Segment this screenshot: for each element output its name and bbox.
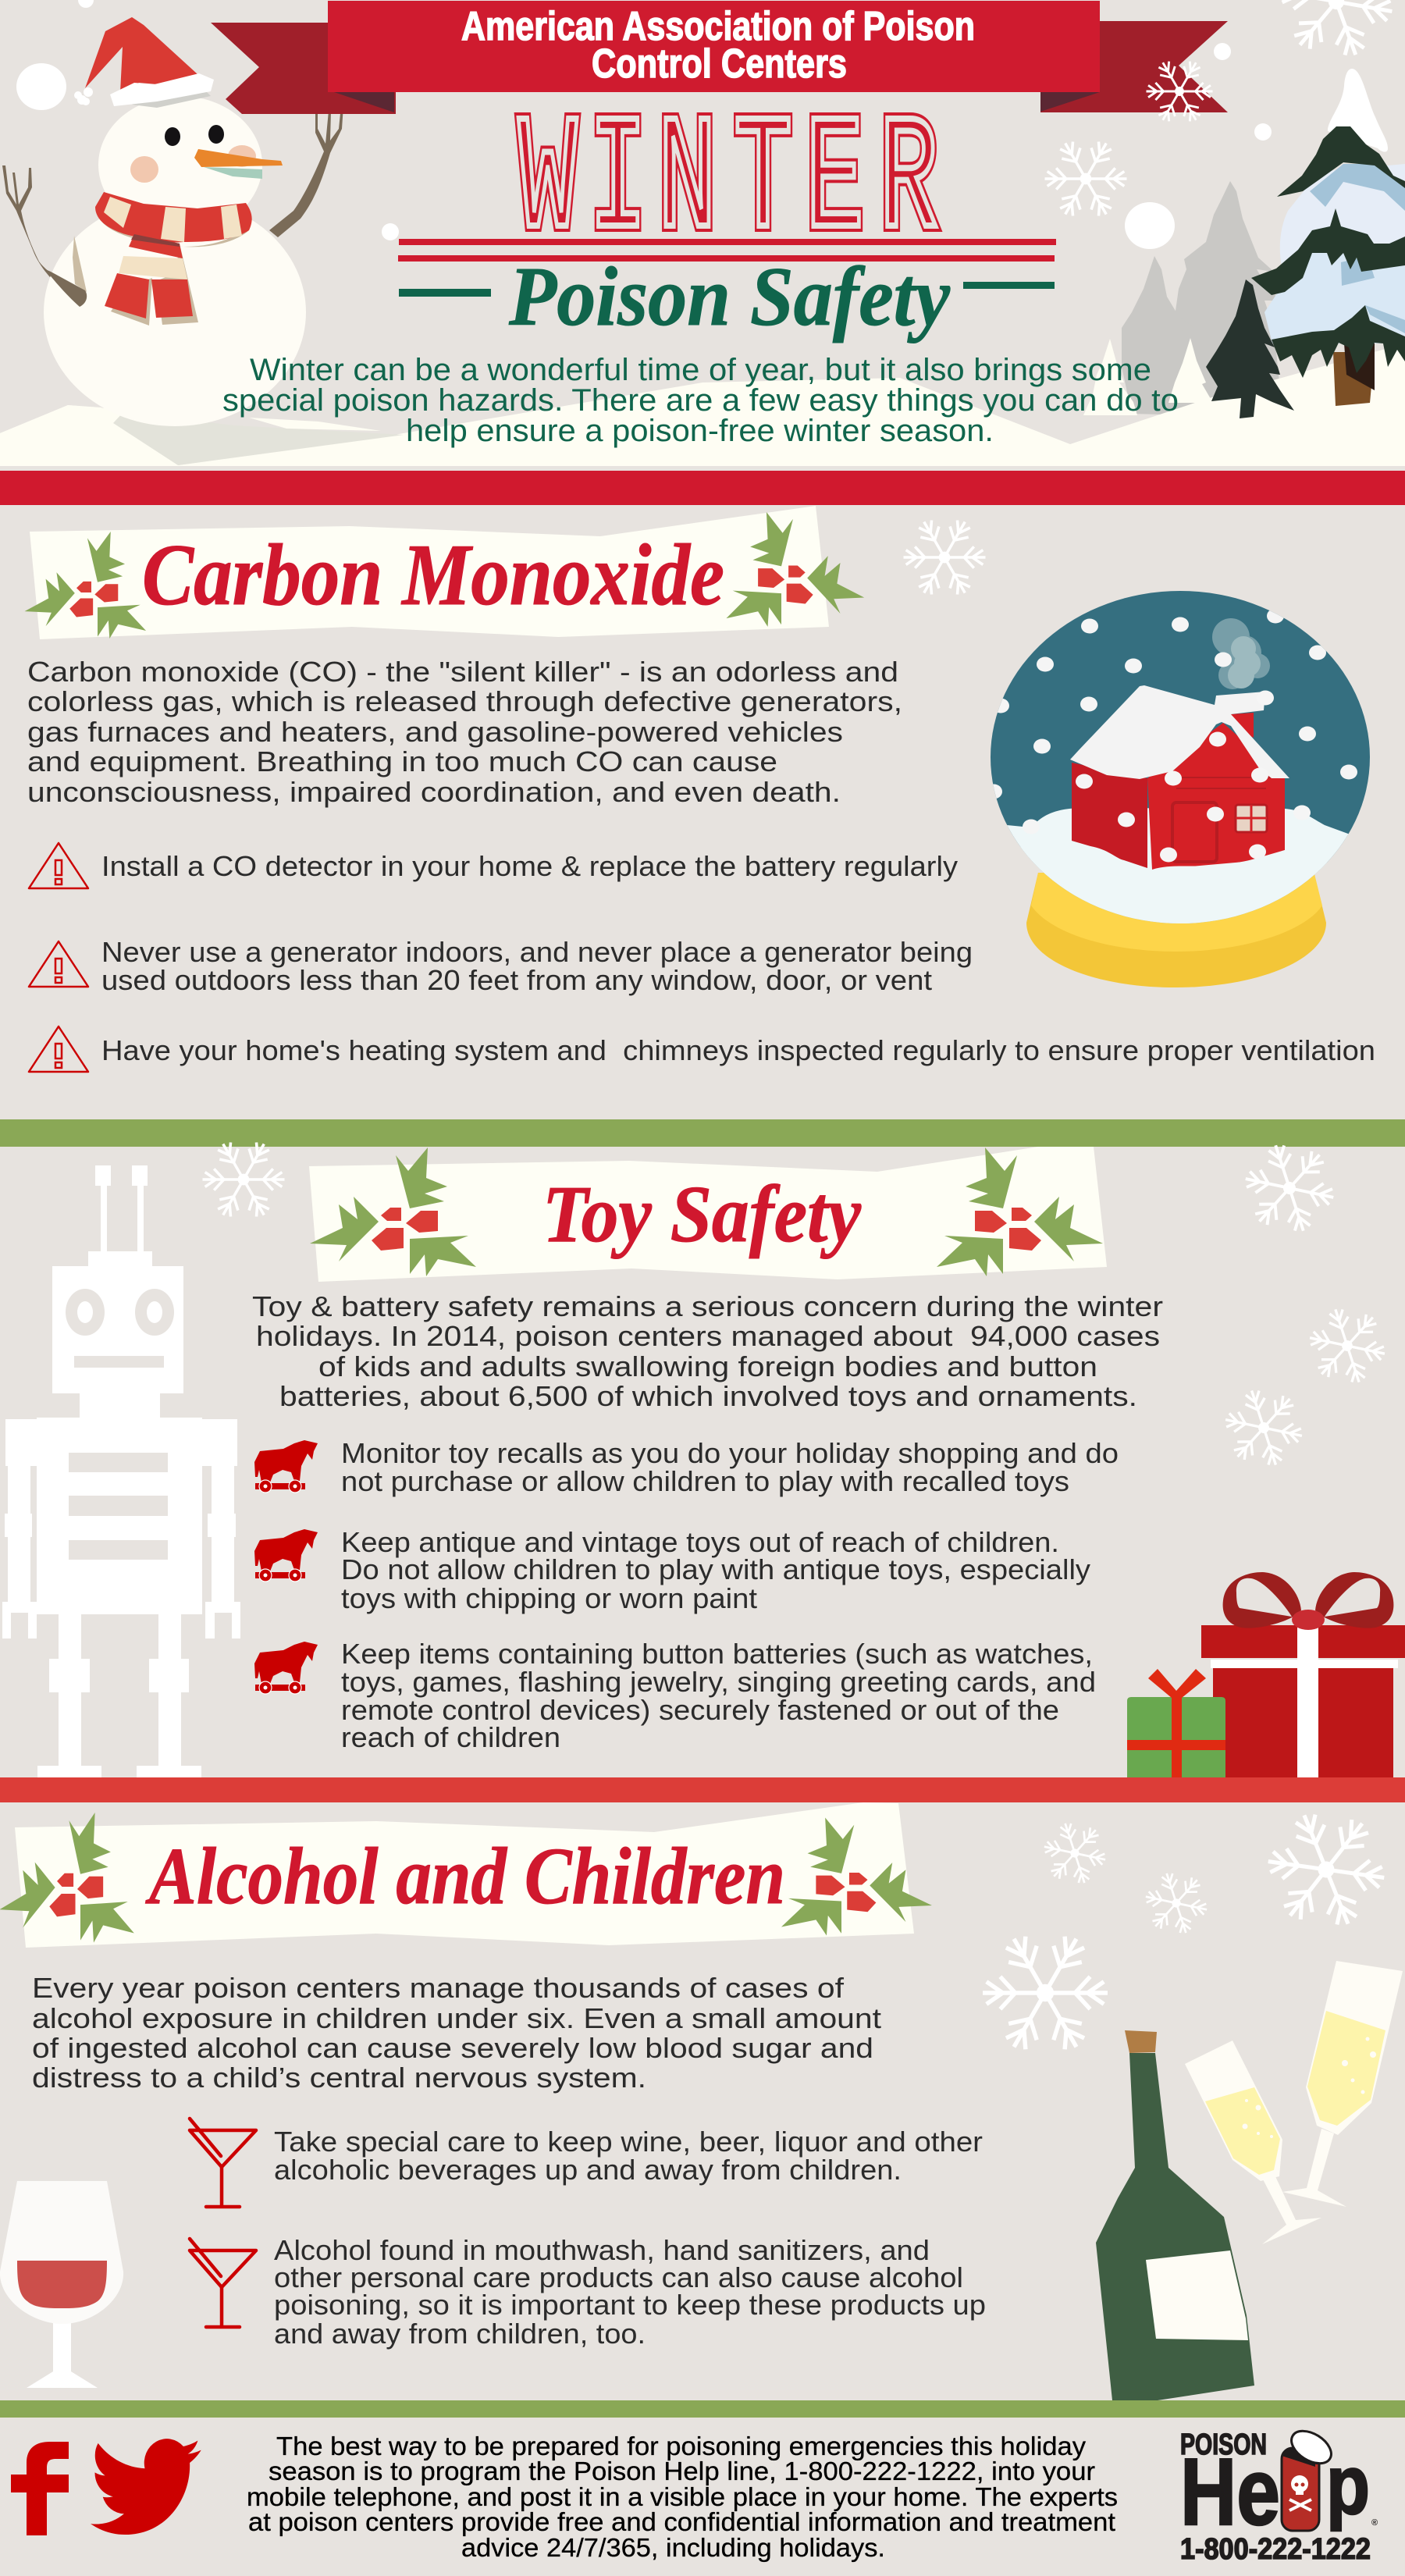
- bullet: personal care products: poisoning, so it is important to keep these products up: [274, 2289, 986, 2321]
- banner: carbon monoxide: Carbon Monoxide: [142, 527, 724, 624]
- wine bottle: [1096, 2030, 1254, 2400]
- alcohol paragraph: alcohol exposure in children under six. Even a small amount: [32, 2002, 881, 2034]
- alcohol paragraph: of ingested alcohol can cause severely low blood sugar and: [32, 2032, 873, 2064]
- toy safety paragraph: holidays. In 2014, poison centers managed about 94,000 cases: [256, 1320, 1160, 1352]
- banner: toy safety: Toy Safety: [542, 1169, 862, 1259]
- intro text: [222, 353, 1179, 448]
- panel: carbon monoxide: [25, 506, 1375, 1072]
- snowflake on ribbon: [1146, 59, 1213, 124]
- footer text: advice 24/7/365, including holidays.: [461, 2533, 885, 2562]
- bullet: heating system: Have your home's heating system and chimneys inspected regularly to ensure proper ventilation: [101, 1034, 1375, 1066]
- house: [1231, 713, 1254, 738]
- bullet: toy recalls: [254, 1437, 1119, 1497]
- banner: alcohol and children: [0, 1802, 932, 1948]
- alcohol paragraph: Every year poison centers manage thousands of cases of: [32, 1972, 845, 2004]
- bullet: heating system: [29, 1026, 1375, 1072]
- champagne glasses: [1185, 1961, 1403, 2244]
- footer text: at poison centers provide free and confidential information and treatment: [248, 2507, 1115, 2536]
- title rules: [398, 239, 1056, 262]
- gift boxes: [1127, 1572, 1405, 1777]
- green section bar 2: [0, 2400, 1405, 2418]
- carbon monoxide paragraph: unconsciousness, impaired coordination, and even death.: [27, 776, 841, 808]
- snowman: [2, 17, 343, 426]
- logo: Poison Help: POISON: [1180, 2428, 1267, 2461]
- heading: Poison Safety: Poison Safety: [508, 251, 951, 343]
- red section bar 1: [0, 471, 1405, 505]
- logo: Poison Help: He: [1180, 2439, 1280, 2545]
- bullet: antique toys: Do not allow children to play with antique toys, especially: [341, 1553, 1090, 1585]
- logo: Poison Help: 1-800-222-1222: [1180, 2533, 1371, 2566]
- logo: Poison Help: [1180, 2425, 1378, 2566]
- intro text: help ensure a poison-free winter season.: [406, 414, 994, 448]
- footer text: [247, 2432, 1118, 2562]
- icon: twitter bird: [91, 2439, 201, 2535]
- wine glass: [0, 2181, 123, 2388]
- bullet: antique toys: [254, 1526, 1090, 1614]
- bullet: keep drinks away: alcoholic beverages up and away from children.: [274, 2154, 902, 2186]
- carbon monoxide paragraph: [27, 656, 902, 808]
- small dark pine tree: [1206, 279, 1294, 418]
- bullet: antique toys: Keep antique and vintage toys out of reach of children.: [341, 1526, 1059, 1558]
- bullet: personal care products: other personal care products can also cause alcohol: [274, 2261, 963, 2293]
- intro text: Winter can be a wonderful time of year, but it also brings some: [250, 353, 1151, 387]
- smoke: [1212, 618, 1270, 689]
- bullet: personal care products: [190, 2234, 986, 2350]
- banner: alcohol and children: Alcohol and Children: [145, 1831, 785, 1921]
- toy safety paragraph: [252, 1290, 1163, 1412]
- carbon monoxide paragraph: colorless gas, which is released through defective generators,: [27, 685, 902, 717]
- snowflakes: [983, 1804, 1393, 2055]
- title ribbon: [211, 1, 1228, 114]
- bullet: generator: [29, 936, 973, 996]
- logo: Poison Help: ®: [1371, 2518, 1378, 2528]
- header scene: distant trees: [1083, 181, 1280, 415]
- panel: alcohol and children: [0, 1802, 1403, 2400]
- footer text: season is to program the Poison Help line, 1-800-222-1222, into your: [269, 2457, 1095, 2485]
- heading: WINTER: WINTER: [518, 91, 938, 275]
- header decorations: snowballs and snowflakes: [16, 0, 1402, 249]
- bullet: button batteries: [254, 1638, 1096, 1753]
- bullet: antique toys: toys with chipping or worn paint: [341, 1582, 757, 1614]
- alcohol paragraph: distress to a child’s central nervous system.: [32, 2062, 646, 2094]
- bullet: keep drinks away: [190, 2119, 983, 2207]
- large snowy pine tree: [1251, 69, 1405, 406]
- footer text: mobile telephone, and post it in a visible place in your home. The experts: [247, 2482, 1118, 2511]
- bullet: button batteries: remote control devices) securely fastened or out of the: [341, 1694, 1059, 1726]
- falling snow: [985, 609, 1357, 862]
- bullet: keep drinks away: Take special care to keep wine, beer, liquor and other: [274, 2126, 983, 2158]
- bullet: button batteries: Keep items containing button batteries (such as watches,: [341, 1638, 1093, 1670]
- toy safety paragraph: of kids and adults swallowing foreign bodies and button: [318, 1350, 1097, 1382]
- robot illustration: [2, 1165, 240, 1777]
- banner: toy safety: [309, 1147, 1107, 1282]
- bullet: button batteries: reach of children: [341, 1721, 560, 1753]
- toy safety paragraph: Toy & battery safety remains a serious concern during the winter: [252, 1290, 1163, 1322]
- logo: Poison Help: p: [1326, 2438, 1370, 2532]
- bullet: button batteries: toys, games, flashing jewelry, singing greeting cards, and: [341, 1666, 1096, 1698]
- heading: WINTER: WINTER: [518, 91, 938, 275]
- carbon monoxide paragraph: Carbon monoxide (CO) - the "silent killer" - is an odorless and: [27, 656, 898, 688]
- bullet: generator: used outdoors less than 20 feet from any window, door, or vent: [101, 964, 932, 996]
- footer text: The best way to be prepared for poisoning emergencies this holiday: [276, 2432, 1087, 2460]
- red section bar 2: [0, 1777, 1405, 1802]
- bullet: generator: Never use a generator indoors, and never place a generator being: [101, 936, 973, 968]
- green section bar: [0, 1119, 1405, 1147]
- panel: toy safety: [2, 1135, 1405, 1777]
- bullet: CO detector: Install a CO detector in your home & replace the battery regularly: [101, 850, 958, 882]
- carbon monoxide paragraph: gas furnaces and heaters, and gasoline-powered vehicles: [27, 716, 843, 748]
- snowy ground: [0, 343, 1405, 466]
- organisation name: American Association of Poison: [461, 4, 975, 49]
- footer: [11, 2425, 1378, 2566]
- alcohol paragraph: [32, 1972, 881, 2094]
- bullet: CO detector: [29, 843, 958, 888]
- icon: facebook: [11, 2442, 69, 2535]
- carbon monoxide paragraph: and equipment. Breathing in too much CO can cause: [27, 745, 777, 777]
- bullet: personal care products: and away from children, too.: [274, 2318, 646, 2350]
- snowflakes: [203, 1135, 1393, 1474]
- snow globe illustration: [968, 591, 1389, 987]
- bullet: toy recalls: not purchase or allow children to play with recalled toys: [341, 1465, 1069, 1497]
- toy safety paragraph: batteries, about 6,500 of which involved toys and ornaments.: [279, 1380, 1137, 1412]
- bullet: personal care products: Alcohol found in mouthwash, hand sanitizers, and: [274, 2234, 930, 2266]
- banner: carbon monoxide: [25, 506, 864, 639]
- title ribbon: Control Centers: [592, 41, 847, 87]
- snowflake: [904, 517, 985, 598]
- bullet: toy recalls: Monitor toy recalls as you do your holiday shopping and do: [341, 1437, 1119, 1469]
- intro text: special poison hazards. There are a few easy things you can do to: [222, 383, 1179, 418]
